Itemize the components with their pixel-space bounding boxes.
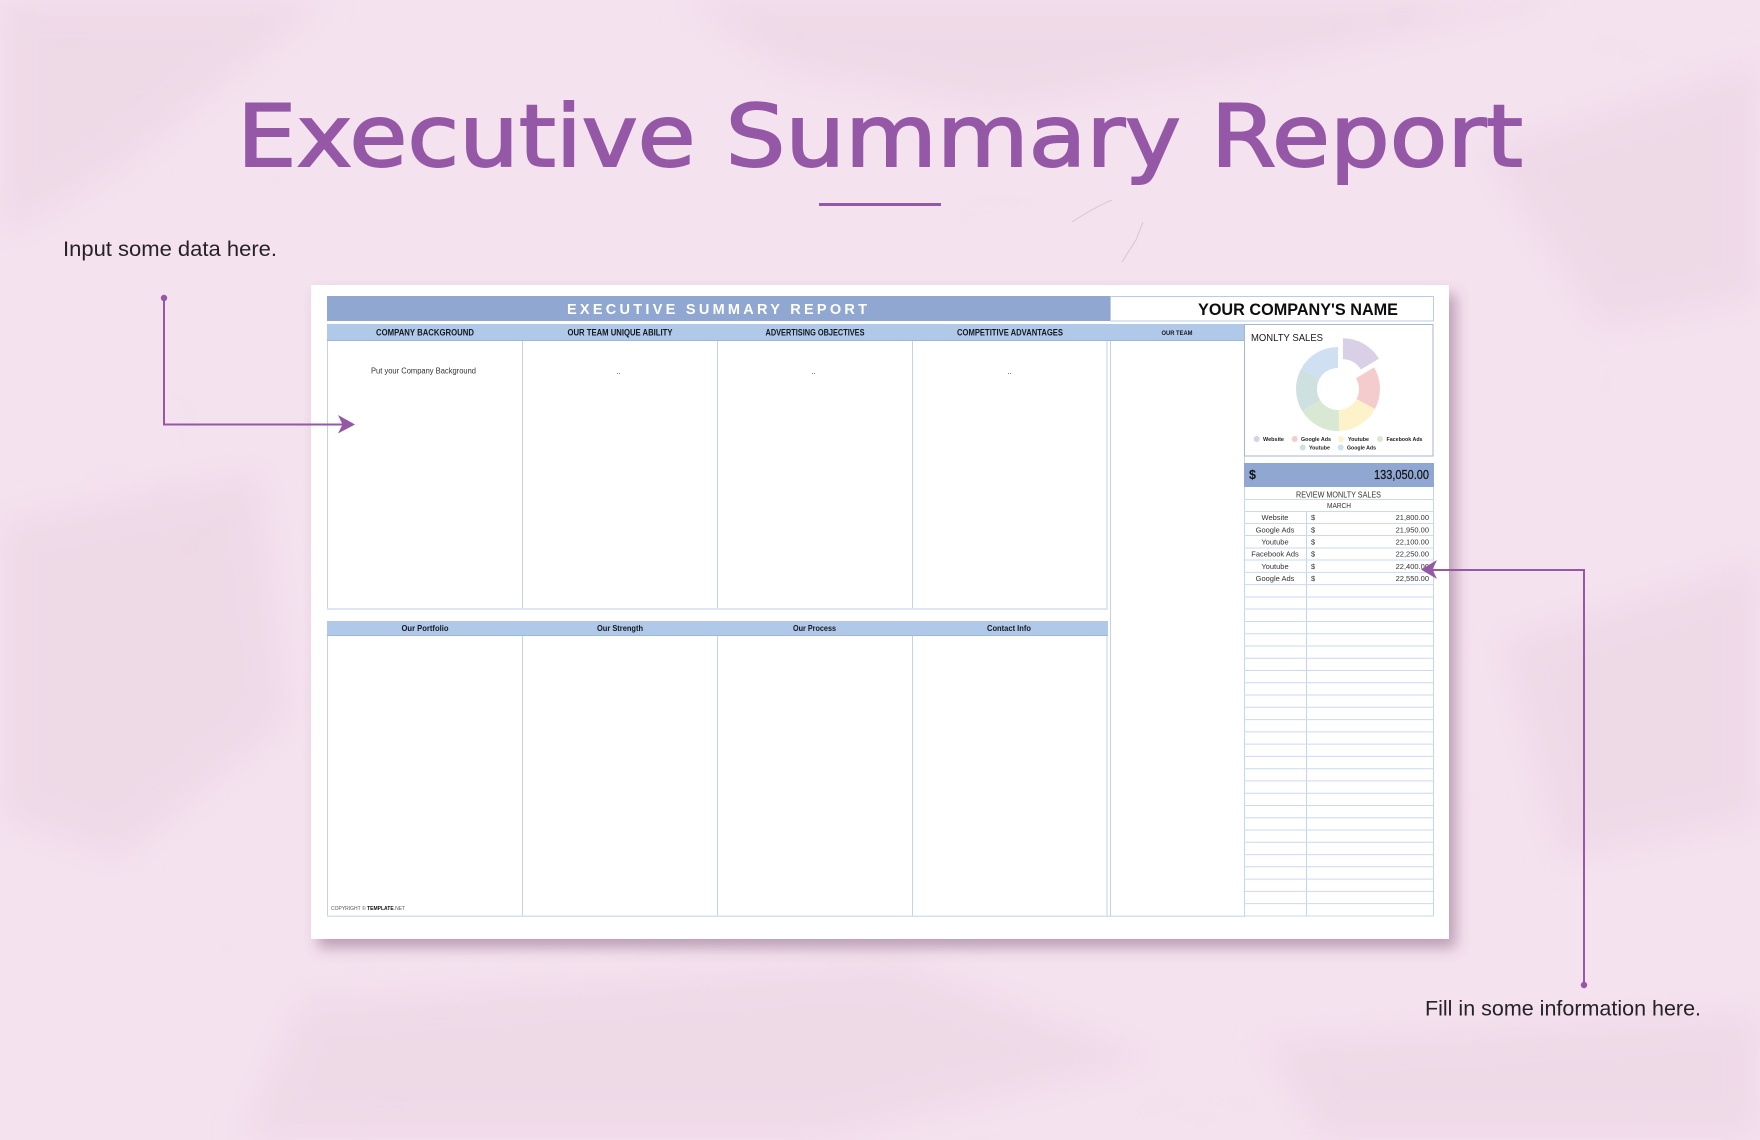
top section column headers: OUR TEAM	[1162, 331, 1192, 337]
table rows: Facebook Ads	[1251, 550, 1299, 559]
table rows	[1251, 513, 1429, 583]
bottom section column headers: Our Portfolio	[402, 623, 448, 633]
copyright: COPYRIGHT © TEMPLATE.NET	[331, 905, 405, 912]
table rows: $	[1311, 513, 1316, 522]
arrow: input data to company background	[161, 295, 355, 434]
report header bar: EXECUTIVE SUMMARY REPORT	[567, 302, 867, 318]
company name box: YOUR COMPANY'S NAME	[1198, 301, 1398, 319]
top section column headers: COMPETITIVE ADVANTAGES	[957, 328, 1063, 338]
table rows: Google Ads	[1256, 574, 1295, 583]
top section column headers: OUR TEAM UNIQUE ABILITY	[568, 328, 672, 338]
top section columns	[327, 341, 1108, 610]
bottom section column headers: Our Process	[793, 623, 836, 633]
chart title: MONLTY SALES	[1251, 332, 1323, 344]
column placeholders: ..	[1007, 367, 1012, 376]
chart legend: Google Ads	[1347, 446, 1376, 452]
table rows: 22,400.00	[1396, 562, 1429, 571]
table rows: 21,800.00	[1396, 513, 1429, 522]
table title: REVIEW MONLTY SALES	[1296, 490, 1381, 500]
table rows: $	[1311, 574, 1316, 583]
table rows: Website	[1262, 513, 1288, 522]
chart legend	[1254, 436, 1422, 452]
table rows: 22,100.00	[1396, 538, 1429, 546]
annotation: input data: Input some data here.	[63, 238, 277, 261]
table rows: Youtube	[1261, 538, 1289, 546]
top section column headers: COMPANY BACKGROUND	[376, 328, 474, 338]
company name box	[1110, 296, 1434, 321]
our team column	[1110, 341, 1244, 916]
arrow: fill information to sales table	[1421, 560, 1587, 988]
chart legend: Youtube	[1348, 437, 1369, 443]
report header bar	[327, 296, 1110, 321]
table rows: $	[1311, 538, 1316, 546]
table rows: $	[1311, 525, 1316, 534]
table month: MARCH	[1327, 503, 1351, 510]
chart legend: Website	[1263, 437, 1284, 443]
company background placeholder: Put your Company Background	[371, 366, 476, 376]
panel: spreadsheet sheet	[311, 285, 1449, 939]
bottom section columns	[327, 636, 1245, 917]
table rows: 22,550.00	[1396, 574, 1429, 583]
donut chart	[1296, 338, 1380, 431]
chart legend: Facebook Ads	[1386, 437, 1422, 443]
column placeholders: ..	[811, 367, 816, 376]
table rows: $	[1311, 562, 1316, 571]
table rows: Google Ads	[1256, 525, 1295, 534]
bottom section column headers: Our Strength	[597, 623, 643, 633]
bottom section column headers	[327, 621, 1108, 636]
sales table	[1244, 487, 1434, 916]
chart legend: Google Ads	[1301, 437, 1331, 443]
title: Executive Summary Report	[237, 87, 1523, 187]
column placeholders	[616, 367, 1012, 376]
table rows: 22,250.00	[1396, 550, 1429, 559]
table rows: $	[1311, 550, 1316, 559]
title underline	[819, 203, 941, 206]
bottom section column headers: Contact Info	[987, 623, 1031, 633]
total sales bar	[1244, 463, 1434, 487]
chart legend: Youtube	[1309, 446, 1330, 452]
total sales bar: $	[1249, 468, 1256, 482]
table rows: 21,950.00	[1396, 525, 1429, 534]
annotation: fill information: Fill in some information here.	[1425, 998, 1701, 1020]
top section column headers	[327, 324, 1244, 341]
top section column headers: ADVERTISING OBJECTIVES	[766, 328, 864, 338]
table rows: Youtube	[1261, 562, 1289, 571]
total sales bar: 133,050.00	[1374, 467, 1429, 482]
panel: monthly sales chart	[1244, 324, 1433, 456]
column placeholders: ..	[616, 367, 621, 376]
